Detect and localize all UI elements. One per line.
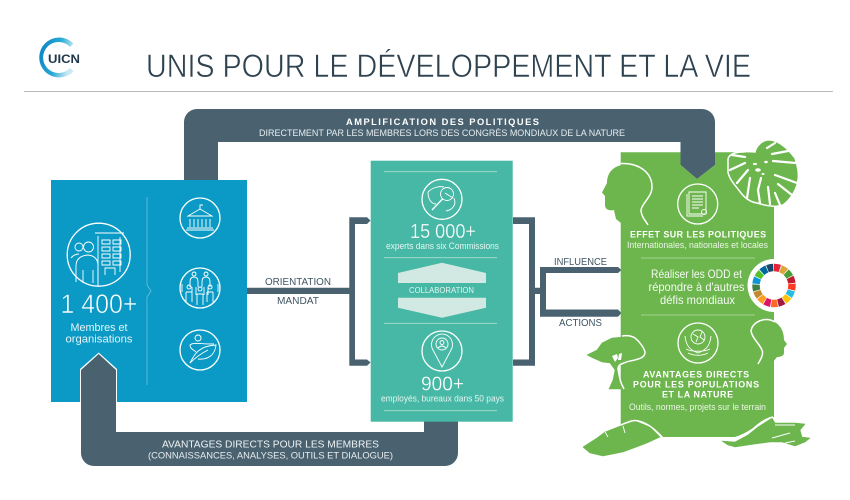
- panel: members: [51, 180, 247, 402]
- illustration: tree: [587, 336, 645, 389]
- collaboration arrows: COLLABORATION: [409, 286, 474, 295]
- band heading: AMPLIFICATION DES POLITIQUES: [346, 117, 539, 127]
- label: mandat: MANDAT: [277, 296, 319, 307]
- top feedback band: amplification des politiques: [184, 109, 715, 182]
- heading: avantages directs: ET LA NATURE: [662, 390, 733, 400]
- collaboration arrows: [398, 263, 486, 318]
- connector: influence and actions: [513, 217, 622, 366]
- heading: avantages directs: AVANTAGES DIRECTS: [643, 370, 749, 380]
- label: tools and projects: Outils, normes, projets sur le terrain: [629, 402, 766, 413]
- stat: 900+: 900+: [421, 374, 464, 396]
- heading: effet sur les politiques: EFFET SUR LES POLITIQUES: [630, 229, 766, 239]
- title: UNIS POUR LE DÉVELOPPEMENT ET LA VIE: [146, 48, 751, 84]
- label: membres et organisations: Membres et: [70, 322, 128, 334]
- text: SDG goal: défis mondiaux: [660, 293, 735, 307]
- text: SDG goal: répondre à d'autres: [648, 280, 744, 294]
- illustration: head silhouette left: [602, 163, 652, 225]
- stat: 15 000+: 15 000+: [410, 221, 476, 243]
- icon: location pin with person: [422, 331, 462, 371]
- text: SDG goal: Réaliser les ODD et: [651, 267, 743, 281]
- illustration: head silhouette right: [751, 320, 787, 364]
- text: SDG goal: [648, 267, 744, 307]
- illustration: monstera leaf: [728, 140, 798, 206]
- icon: people and building: [67, 223, 130, 286]
- heading: avantages directs: POUR LES POPULATIONS: [633, 380, 759, 390]
- icon: policy document: [678, 184, 718, 224]
- label: staff and offices: employés, bureaux dans 50 pays: [381, 394, 504, 405]
- label: membres et organisations: organisations: [66, 334, 133, 346]
- panel: impact: [583, 140, 810, 456]
- icon: person and leaf: [180, 330, 220, 370]
- band heading: AVANTAGES DIRECTS POUR LES MEMBRES: [162, 438, 379, 450]
- band subheading: DIRECTEMENT PAR LES MEMBRES LORS DES CONGRÈS MONDIAUX DE LA NATURE: [259, 128, 625, 139]
- logo: UICN: UICN: [48, 54, 80, 66]
- label: levels: Internationales, nationales et locales: [627, 240, 768, 251]
- icon: hands holding earth: [678, 323, 718, 363]
- label: experts: experts dans six Commissions: [386, 241, 499, 252]
- label: actions: ACTIONS: [559, 318, 602, 329]
- label: influence: INFLUENCE: [554, 257, 607, 268]
- logo: UICN: [39, 38, 81, 78]
- label: orientation: ORIENTATION: [265, 277, 331, 288]
- band subheading: (CONNAISSANCES, ANALYSES, OUTILS ET DIALOGUE): [148, 450, 393, 462]
- icon: magnifying glass on leaf: [422, 179, 462, 219]
- stat: 1 400+: 1 400+: [60, 289, 138, 319]
- bottom feedback band: avantages directs pour les membres: [81, 354, 458, 466]
- icon: group of people: [180, 268, 220, 308]
- panel: experts and staff: [371, 161, 513, 422]
- connector: orientation and mandate: [247, 217, 370, 366]
- heading: avantages directs: [633, 370, 759, 400]
- illustration: fern bottom right: [722, 417, 810, 447]
- icon: SDG colour wheel: [748, 259, 800, 312]
- illustration: leaf bottom left: [583, 420, 663, 456]
- icon: government building: [180, 198, 220, 238]
- label: membres et organisations: [66, 322, 133, 346]
